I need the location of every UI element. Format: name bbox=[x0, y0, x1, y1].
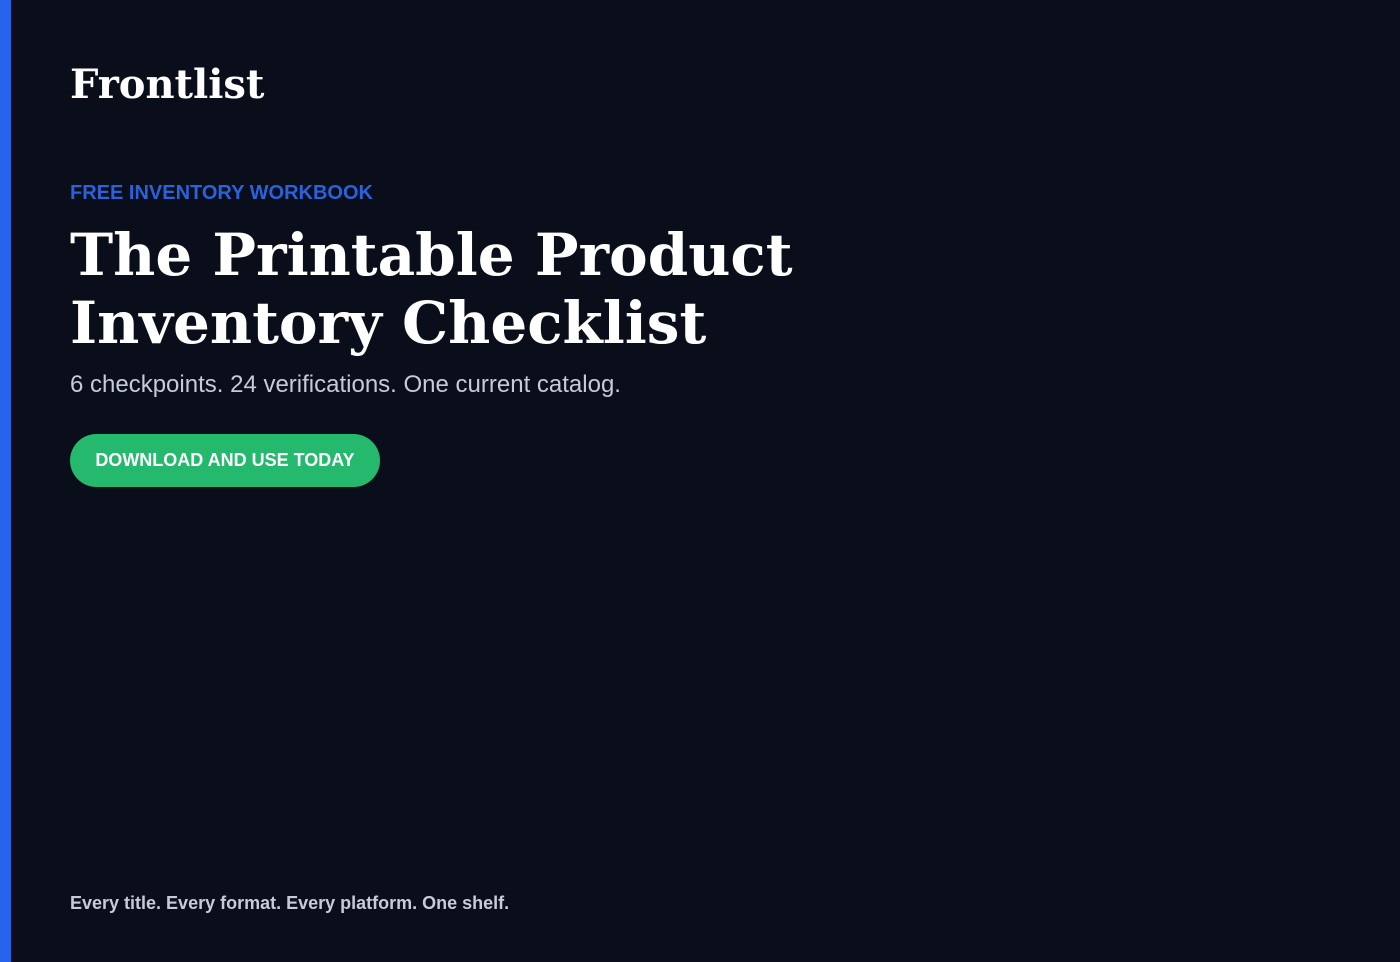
call to action button: DOWNLOAD AND USE TODAY bbox=[95, 450, 355, 470]
main heading: The Printable Product bbox=[70, 221, 793, 289]
brand name: Frontlist bbox=[70, 61, 264, 108]
footer tagline: Every title. Every format. Every platform. One shelf. bbox=[70, 893, 509, 913]
call to action button bbox=[70, 434, 380, 487]
eyebrow label: FREE INVENTORY WORKBOOK bbox=[70, 182, 373, 204]
subtitle: 6 checkpoints. 24 verifications. One current catalog. bbox=[70, 371, 621, 398]
main heading bbox=[70, 221, 793, 357]
main heading: Inventory Checklist bbox=[70, 289, 706, 357]
accent bar bbox=[0, 0, 11, 962]
